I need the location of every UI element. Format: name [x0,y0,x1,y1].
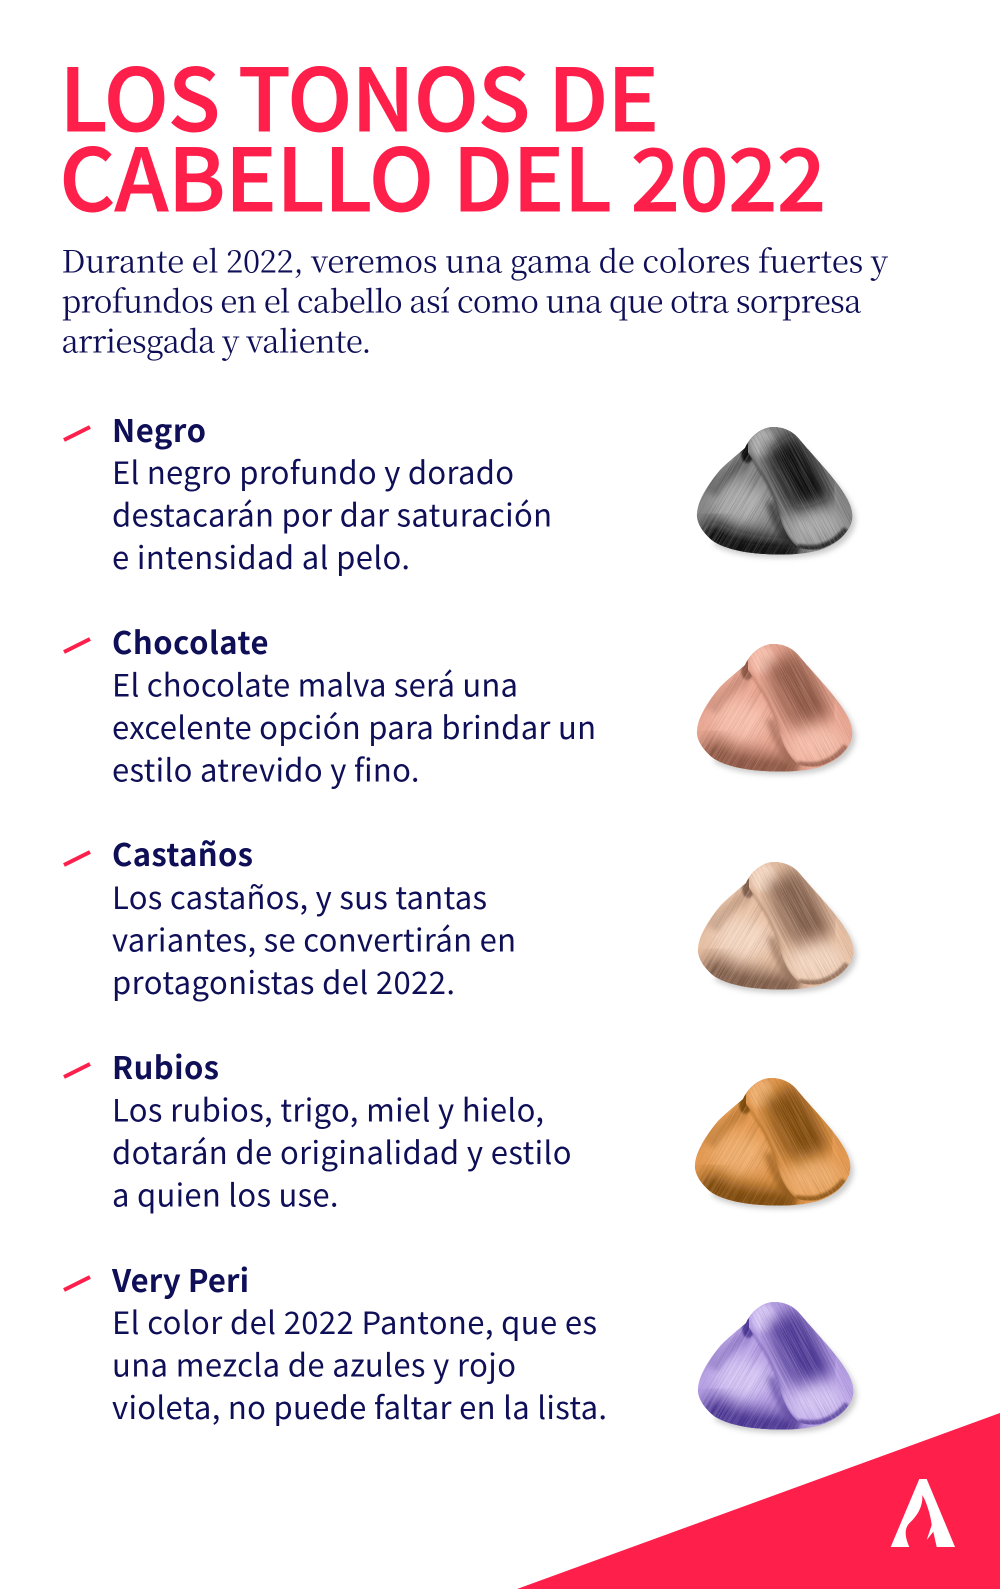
hair swatch: very peri [595,1212,959,1533]
description: Castaños: variantes, se convertirán en [112,916,516,960]
item: Negro [64,406,552,578]
heading: Chocolate: Chocolate [112,618,268,663]
bullet stroke [64,852,90,865]
bullet stroke [64,639,90,652]
item: Castaños [64,830,516,1003]
item: Very Peri [64,1256,607,1428]
bullet stroke [64,427,90,440]
description: Negro: El negro profundo y dorado [112,448,514,493]
description: Chocolate [112,660,596,790]
description: Castaños [112,873,516,1003]
intro paragraph: profundos en el cabello así como una que otra sorpresa [62,276,862,322]
description: Rubios [112,1086,572,1216]
description: Very Peri: El color del 2022 Pantone, que es [112,1298,597,1343]
item: Rubios [64,1043,572,1216]
heading: Very Peri: Very Peri [111,1256,249,1301]
description: Rubios: a quien los use. [112,1170,338,1216]
description: Chocolate: excelente opción para brindar un [112,703,596,748]
description: Chocolate: estilo atrevido y fino. [112,746,420,790]
hair swatch: black [594,337,958,658]
heading: Rubios: Rubios [112,1043,219,1088]
title: CABELLO DEL 2022 [60,111,826,236]
description: Negro: e intensidad al pelo. [112,533,410,578]
heading: Negro: Negro [112,406,206,451]
description: Castaños: protagonistas del 2022. [112,958,455,1003]
logo: flame A [891,1479,955,1547]
bullet stroke [64,1277,90,1290]
description: Rubios: dotarán de originalidad y estilo [112,1128,572,1173]
item: Chocolate [64,618,596,790]
title [60,31,826,236]
description: Rubios: Los rubios, trigo, miel y hielo, [112,1086,544,1130]
description: Negro: destacarán por dar saturación [112,490,552,536]
intro paragraph: Durante el 2022, veremos una gama de colores fuertes y [62,236,889,282]
heading: Castaños: Castaños [112,830,253,875]
description: Very Peri: violeta, no puede faltar en la lista. [112,1383,607,1428]
hair swatch: chestnut [595,772,959,1093]
hair swatch: blonde [592,988,956,1309]
corner triangle [517,1413,1000,1589]
intro paragraph [62,236,889,362]
description: Very Peri [112,1298,607,1428]
intro paragraph: arriesgada y valiente. [62,316,372,362]
title: LOS TONOS DE [60,31,659,156]
description: Castaños: Los castaños, y sus tantas [112,873,487,918]
hair swatch: chocolate [594,554,958,875]
bullet stroke [64,1064,90,1077]
description: Negro [112,448,552,578]
description: Chocolate: El chocolate malva será una [112,660,518,706]
description: Very Peri: una mezcla de azules y rojo [112,1340,516,1386]
